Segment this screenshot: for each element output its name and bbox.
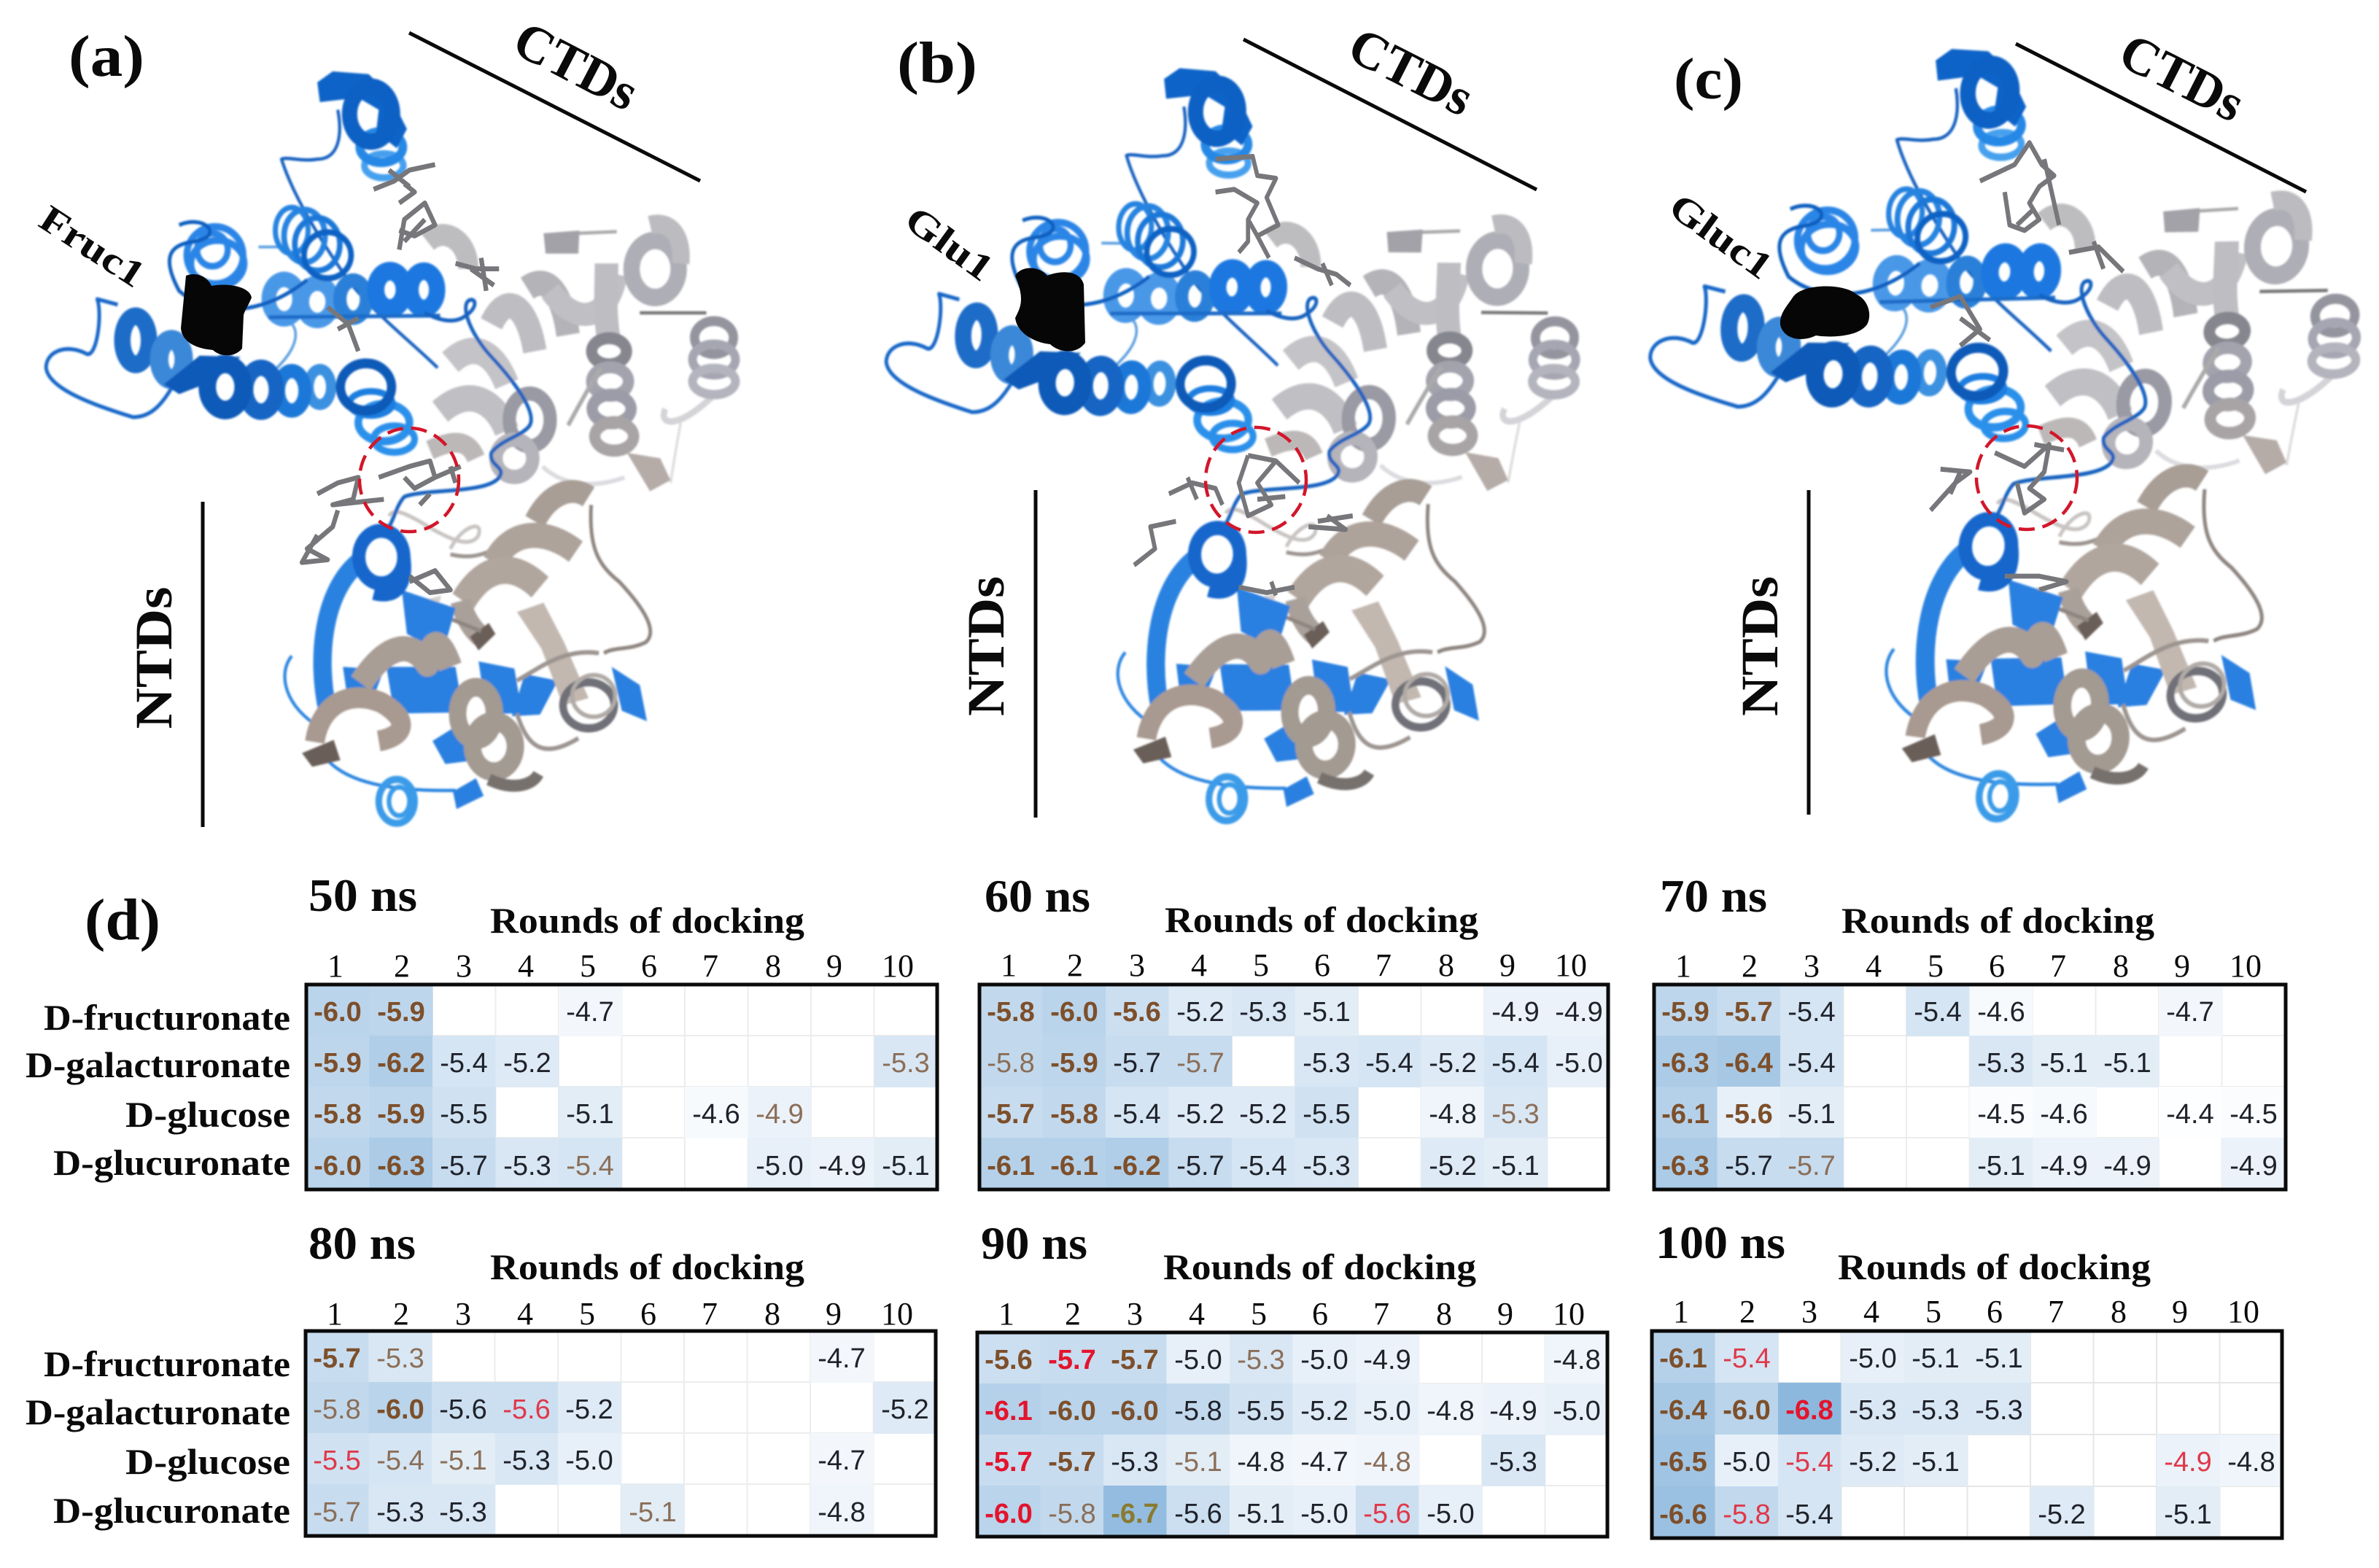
row labels 80 ns: D-glucose — [125, 1441, 290, 1482]
heatmap 60 ns: -6.0 — [1050, 997, 1098, 1028]
heatmap 50 ns — [306, 985, 938, 1189]
heatmap 80 ns: -5.6 — [502, 1394, 551, 1425]
heatmap 80 ns: -5.3 — [439, 1497, 487, 1528]
heatmap 60 ns — [979, 985, 1610, 1189]
heatmap 90 ns: -5.3 — [1111, 1447, 1159, 1478]
column numbers 100 ns — [1673, 1294, 2259, 1330]
column numbers 70 ns: 6 — [1989, 948, 2005, 984]
column numbers 100 ns: 1 — [1673, 1294, 1689, 1330]
heatmap 70 ns — [1654, 985, 2286, 1189]
ligands b — [1134, 156, 1353, 595]
row labels 50 ns: D-glucuronate — [53, 1142, 290, 1183]
CTDs label a: CTDs — [505, 9, 648, 122]
red dashed circle b — [1206, 427, 1306, 532]
heatmap 90 ns: -6.1 — [985, 1396, 1033, 1427]
heatmap 100 ns: -5.3 — [1912, 1395, 1960, 1426]
heatmap 100 ns: -6.6 — [1659, 1499, 1707, 1530]
column numbers 80 ns: 1 — [327, 1296, 343, 1332]
column numbers 70 ns: 10 — [2229, 948, 2262, 984]
column numbers 50 ns: 8 — [765, 948, 781, 984]
NTDs label c: NTDs — [1731, 576, 1789, 716]
column numbers 90 ns: 5 — [1251, 1296, 1267, 1332]
heatmap 100 ns: -6.1 — [1659, 1343, 1707, 1374]
heatmap 80 ns: -5.2 — [565, 1394, 613, 1425]
column numbers 60 ns: 5 — [1253, 947, 1269, 983]
column numbers 90 ns — [998, 1296, 1585, 1332]
heatmap 70 ns: -5.3 — [1977, 1048, 2025, 1079]
panel: 90 ns table — [977, 1217, 1609, 1537]
column numbers 50 ns: 3 — [456, 948, 472, 984]
heatmap 60 ns: -5.8 — [987, 1048, 1035, 1079]
heatmap 50 ns: -5.7 — [440, 1151, 488, 1181]
heatmap 100 ns: -5.1 — [1912, 1447, 1960, 1478]
column numbers 100 ns: 5 — [1925, 1294, 1941, 1330]
column numbers 50 ns: 2 — [394, 948, 410, 984]
column numbers 60 ns — [1001, 947, 1587, 983]
heatmap 60 ns: -6.1 — [1050, 1151, 1098, 1181]
column numbers 100 ns: 10 — [2227, 1294, 2259, 1330]
column numbers 70 ns: 3 — [1804, 948, 1820, 984]
heatmap 70 ns: -6.3 — [1661, 1048, 1709, 1079]
heatmap 70 ns: -4.6 — [1977, 997, 2025, 1028]
row labels 80 ns: D-galacturonate — [26, 1392, 290, 1432]
heatmap 100 ns: -4.8 — [2227, 1447, 2275, 1478]
column numbers 70 ns: 5 — [1928, 948, 1944, 984]
column numbers 100 ns: 9 — [2172, 1294, 2188, 1330]
heatmap 90 ns: -4.7 — [1300, 1447, 1348, 1478]
heatmap 70 ns: -4.4 — [2166, 1099, 2214, 1130]
column numbers 70 ns: 2 — [1742, 948, 1758, 984]
heatmap 100 ns: -5.3 — [1975, 1395, 2023, 1426]
label (b): (b) — [897, 31, 977, 96]
panel: 70 ns table — [1654, 870, 2286, 1189]
column numbers 70 ns — [1675, 948, 2262, 984]
heatmap 90 ns: -5.5 — [1237, 1396, 1285, 1427]
column numbers 90 ns: 8 — [1436, 1296, 1452, 1332]
heading 60 ns: 60 ns — [985, 870, 1090, 922]
column numbers 80 ns: 9 — [826, 1296, 842, 1332]
heatmap 70 ns: -4.7 — [2166, 997, 2214, 1028]
heatmap 50 ns: -5.1 — [566, 1099, 614, 1130]
heading 80 ns: 80 ns — [308, 1217, 416, 1269]
column numbers 50 ns: 4 — [518, 948, 534, 984]
heatmap 50 ns: -4.7 — [566, 997, 614, 1028]
column numbers 50 ns — [327, 948, 914, 984]
heatmap 100 ns: -6.4 — [1659, 1395, 1707, 1426]
heatmap 50 ns: -4.6 — [692, 1099, 740, 1130]
CTDs line a — [409, 33, 700, 181]
NTDs label b: NTDs — [957, 576, 1015, 716]
column numbers 50 ns: 6 — [641, 948, 657, 984]
row labels 50 ns: D-fructuronate — [44, 997, 290, 1038]
heatmap 80 ns: -5.1 — [629, 1497, 677, 1528]
heatmap 60 ns: -5.8 — [1050, 1099, 1098, 1130]
red dashed circle c — [1976, 426, 2077, 529]
column numbers 90 ns: 1 — [998, 1296, 1014, 1332]
heatmap 60 ns: -5.7 — [1113, 1048, 1161, 1079]
Fruc1 label: Fruc1 — [32, 198, 152, 296]
heatmap 80 ns: -5.2 — [881, 1394, 929, 1425]
heatmap 70 ns: -4.9 — [2229, 1151, 2278, 1181]
heatmap 60 ns: -5.7 — [987, 1099, 1035, 1130]
heatmap 100 ns: -6.0 — [1723, 1395, 1771, 1426]
axis title 100 ns: Rounds of docking — [1838, 1246, 2151, 1287]
heading 50 ns: 50 ns — [308, 869, 417, 921]
heatmap 100 ns: -5.2 — [2038, 1499, 2086, 1530]
heatmap 80 ns: -5.6 — [439, 1394, 487, 1425]
NTDs line c — [1807, 490, 1810, 815]
column numbers 90 ns: 10 — [1553, 1296, 1585, 1332]
heatmap 70 ns: -4.9 — [2103, 1151, 2151, 1181]
heatmap 60 ns: -5.3 — [1491, 1099, 1540, 1130]
heatmap 100 ns: -5.2 — [1849, 1447, 1897, 1478]
heatmap 90 ns: -5.8 — [1174, 1396, 1222, 1427]
column numbers 60 ns: 10 — [1555, 947, 1587, 983]
heatmap 90 ns: -4.8 — [1427, 1396, 1475, 1427]
ligands c — [1930, 143, 2123, 590]
column numbers 80 ns: 3 — [455, 1296, 471, 1332]
heatmap 70 ns: -6.3 — [1661, 1151, 1709, 1181]
heatmap 90 ns: -5.3 — [1237, 1345, 1285, 1375]
heatmap 50 ns: -5.4 — [440, 1048, 488, 1079]
row labels 50 ns — [26, 997, 290, 1183]
heatmap 90 ns: -5.7 — [985, 1447, 1033, 1478]
heatmap 60 ns: -5.2 — [1176, 1099, 1225, 1130]
heatmap 90 ns: -5.1 — [1174, 1447, 1222, 1478]
heatmap 100 ns: -5.0 — [1723, 1447, 1771, 1478]
heatmap 50 ns: -6.3 — [377, 1151, 425, 1181]
panel: (b) Glu1 structure — [876, 16, 1583, 823]
heatmap 50 ns: -5.4 — [566, 1151, 614, 1181]
heatmap 80 ns: -5.3 — [376, 1343, 424, 1374]
heatmap 60 ns: -5.2 — [1429, 1151, 1477, 1181]
heatmap 90 ns: -5.7 — [1111, 1345, 1159, 1375]
heatmap 60 ns: -5.1 — [1491, 1151, 1540, 1181]
heading 100 ns: 100 ns — [1656, 1216, 1785, 1268]
heatmap 90 ns: -5.6 — [1174, 1499, 1222, 1529]
row labels 80 ns: D-glucuronate — [53, 1490, 290, 1531]
CTDs line b — [1243, 39, 1537, 190]
protein ribbon b — [876, 66, 1583, 823]
heatmap 60 ns: -5.2 — [1176, 997, 1225, 1028]
protein ribbon c — [1638, 42, 2364, 825]
axis title 70 ns: Rounds of docking — [1842, 900, 2154, 941]
label (a): (a) — [69, 25, 144, 89]
heatmap 100 ns: -5.8 — [1723, 1499, 1771, 1530]
heatmap 60 ns: -5.4 — [1365, 1048, 1413, 1079]
heatmap 80 ns: -5.7 — [313, 1343, 361, 1374]
column numbers 50 ns: 1 — [327, 948, 344, 984]
heatmap 50 ns: -5.2 — [503, 1048, 551, 1079]
heatmap 90 ns: -5.0 — [1363, 1396, 1411, 1427]
heatmap 100 ns: -5.4 — [1785, 1447, 1833, 1478]
heading 70 ns: 70 ns — [1660, 870, 1767, 922]
heatmap 90 ns: -5.0 — [1300, 1345, 1348, 1375]
column numbers 80 ns: 4 — [517, 1296, 533, 1332]
heatmap 70 ns: -5.1 — [2103, 1048, 2151, 1079]
heatmap 90 ns: -4.8 — [1237, 1447, 1285, 1478]
column numbers 60 ns: 2 — [1067, 947, 1083, 983]
Glu1 label: Glu1 — [897, 198, 1001, 290]
heatmap 50 ns: -4.9 — [756, 1099, 804, 1130]
column numbers 80 ns: 8 — [764, 1296, 780, 1332]
heatmap 70 ns: -5.1 — [1788, 1099, 1836, 1130]
axis title 60 ns: Rounds of docking — [1165, 899, 1478, 940]
ligand blob Fruc1 — [181, 274, 252, 355]
heatmap 70 ns: -5.6 — [1725, 1099, 1773, 1130]
heatmap 50 ns: -5.3 — [882, 1048, 930, 1079]
heatmap 60 ns: -4.9 — [1555, 997, 1603, 1028]
heatmap 100 ns: -5.1 — [2164, 1499, 2212, 1530]
heatmap 70 ns: -5.7 — [1725, 1151, 1773, 1181]
heatmap 90 ns: -5.7 — [1048, 1447, 1096, 1478]
ligand blob Gluc1 — [1780, 286, 1869, 339]
label (c): (c) — [1674, 47, 1743, 112]
heatmap 90 ns: -4.8 — [1553, 1345, 1601, 1375]
heatmap 90 ns: -4.9 — [1363, 1345, 1411, 1375]
heatmap 70 ns: -5.4 — [1788, 997, 1836, 1028]
column numbers 100 ns: 3 — [1801, 1294, 1817, 1330]
column numbers 60 ns: 3 — [1129, 947, 1145, 983]
heatmap 90 ns: -5.7 — [1048, 1345, 1096, 1375]
heatmap 70 ns: -5.4 — [1914, 997, 1962, 1028]
heatmap 60 ns: -5.0 — [1555, 1048, 1603, 1079]
CTDs label b: CTDs — [1340, 16, 1483, 128]
heatmap 60 ns: -6.2 — [1113, 1151, 1161, 1181]
heatmap 70 ns: -4.9 — [2040, 1151, 2088, 1181]
heatmap 60 ns: -4.9 — [1491, 997, 1540, 1028]
heatmap 70 ns: -4.5 — [1977, 1099, 2025, 1130]
heatmap 90 ns: -5.8 — [1048, 1499, 1096, 1529]
heatmap 60 ns: -5.6 — [1113, 997, 1161, 1028]
panel: 50 ns table — [26, 869, 938, 1189]
panel: (c) Gluc1 structure — [1638, 22, 2364, 825]
heatmap 80 ns: -5.8 — [313, 1394, 361, 1425]
column numbers 90 ns: 6 — [1312, 1296, 1328, 1332]
heatmap 70 ns: -5.4 — [1788, 1048, 1836, 1079]
heatmap 60 ns: -5.5 — [1303, 1099, 1351, 1130]
column numbers 50 ns: 10 — [882, 948, 914, 984]
heatmap 60 ns: -5.2 — [1239, 1099, 1287, 1130]
column numbers 80 ns: 6 — [640, 1296, 656, 1332]
column numbers 70 ns: 7 — [2050, 948, 2066, 984]
heatmap 90 ns: -5.6 — [985, 1345, 1033, 1375]
heatmap 70 ns: -6.4 — [1725, 1048, 1773, 1079]
heatmap 60 ns: -5.7 — [1176, 1048, 1225, 1079]
heatmap 90 ns: -6.0 — [1111, 1396, 1159, 1427]
heatmap 50 ns: -6.0 — [314, 1151, 362, 1181]
heatmap 50 ns: -5.9 — [314, 1048, 362, 1079]
heatmap 80 ns — [306, 1331, 936, 1536]
heatmap 60 ns: -5.8 — [987, 997, 1035, 1028]
column numbers 100 ns: 4 — [1863, 1294, 1879, 1330]
heatmap 80 ns: -5.3 — [376, 1497, 424, 1528]
heatmap 90 ns: -5.3 — [1489, 1447, 1537, 1478]
column numbers 50 ns: 7 — [702, 948, 718, 984]
column numbers 70 ns: 1 — [1675, 948, 1691, 984]
column numbers 80 ns: 7 — [702, 1296, 718, 1332]
heatmap 70 ns: -5.7 — [1725, 997, 1773, 1028]
heatmap 90 ns: -5.0 — [1553, 1396, 1601, 1427]
heatmap 50 ns: -6.0 — [314, 997, 362, 1028]
heatmap 60 ns: -5.3 — [1303, 1048, 1351, 1079]
CTDs line c — [2016, 44, 2306, 192]
heatmap 100 ns: -6.5 — [1659, 1447, 1707, 1478]
heatmap 60 ns: -6.1 — [987, 1151, 1035, 1181]
column numbers 70 ns: 4 — [1866, 948, 1882, 984]
heatmap 100 ns: -5.4 — [1785, 1499, 1833, 1530]
column numbers 70 ns: 8 — [2113, 948, 2129, 984]
column numbers 80 ns: 10 — [881, 1296, 913, 1332]
heatmap 100 ns: -5.3 — [1849, 1395, 1897, 1426]
heatmap 50 ns: -5.9 — [377, 997, 425, 1028]
heatmap 100 ns: -5.1 — [1975, 1343, 2023, 1374]
heading 90 ns: 90 ns — [981, 1217, 1087, 1269]
heatmap 70 ns: -5.9 — [1661, 997, 1709, 1028]
column numbers 80 ns: 5 — [579, 1296, 595, 1332]
heatmap 50 ns: -5.3 — [503, 1151, 551, 1181]
heatmap 90 ns — [977, 1332, 1609, 1537]
column numbers 60 ns: 4 — [1191, 947, 1207, 983]
ligand blob Glu1 — [1015, 268, 1085, 352]
heatmap 90 ns: -4.9 — [1489, 1396, 1537, 1427]
column numbers 100 ns: 7 — [2048, 1294, 2064, 1330]
heatmap 60 ns: -5.4 — [1239, 1151, 1287, 1181]
heatmap 90 ns: -5.1 — [1237, 1499, 1285, 1529]
heatmap 90 ns: -6.0 — [1048, 1396, 1096, 1427]
red dashed circle a — [360, 428, 459, 532]
column numbers 90 ns: 9 — [1497, 1296, 1513, 1332]
heatmap 80 ns: -4.8 — [818, 1497, 866, 1528]
heatmap 50 ns: -5.8 — [314, 1099, 362, 1130]
panel: (a) Fruc1 structure — [32, 9, 735, 827]
heatmap 60 ns: -4.8 — [1429, 1099, 1477, 1130]
heatmap 70 ns: -4.6 — [2040, 1099, 2088, 1130]
heatmap 80 ns: -4.7 — [818, 1445, 866, 1476]
heatmap 100 ns: -5.0 — [1849, 1343, 1897, 1374]
heatmap 80 ns: -5.7 — [313, 1497, 361, 1528]
row labels 50 ns: D-glucose — [125, 1094, 290, 1135]
column numbers 60 ns: 8 — [1438, 947, 1454, 983]
panel: 60 ns table — [979, 870, 1610, 1189]
column numbers 70 ns: 9 — [2174, 948, 2190, 984]
heatmap 90 ns: -5.0 — [1174, 1345, 1222, 1375]
heatmap 100 ns: -4.9 — [2164, 1447, 2212, 1478]
heatmap 80 ns: -5.3 — [502, 1445, 551, 1476]
heatmap 100 ns — [1652, 1331, 2283, 1538]
heatmap 70 ns: -5.7 — [1788, 1151, 1836, 1181]
heatmap 60 ns: -5.1 — [1303, 997, 1351, 1028]
column numbers 90 ns: 4 — [1189, 1296, 1205, 1332]
heatmap 70 ns: -5.1 — [2040, 1048, 2088, 1079]
column numbers 100 ns: 8 — [2111, 1294, 2127, 1330]
column numbers 100 ns: 2 — [1739, 1294, 1755, 1330]
row labels 80 ns — [26, 1343, 290, 1531]
heatmap 90 ns: -5.0 — [1427, 1499, 1475, 1529]
panel: 100 ns table — [1652, 1216, 2283, 1538]
heatmap 60 ns: -5.4 — [1113, 1099, 1161, 1130]
heatmap 60 ns: -5.9 — [1050, 1048, 1098, 1079]
panel: 80 ns table — [26, 1217, 936, 1536]
column numbers 80 ns — [327, 1296, 913, 1332]
column numbers 90 ns: 3 — [1127, 1296, 1143, 1332]
heatmap 80 ns: -5.0 — [565, 1445, 613, 1476]
column numbers 80 ns: 2 — [393, 1296, 409, 1332]
heatmap 60 ns: -5.3 — [1239, 997, 1287, 1028]
heatmap 80 ns: -5.1 — [439, 1445, 487, 1476]
heatmap 90 ns: -5.2 — [1300, 1396, 1348, 1427]
heatmap 90 ns: -6.0 — [985, 1499, 1033, 1529]
heatmap 70 ns: -6.1 — [1661, 1099, 1709, 1130]
column numbers 60 ns: 6 — [1314, 947, 1330, 983]
column numbers 90 ns: 2 — [1065, 1296, 1081, 1332]
heatmap 50 ns: -5.9 — [377, 1099, 425, 1130]
heatmap 60 ns: -5.3 — [1303, 1151, 1351, 1181]
column numbers 90 ns: 7 — [1373, 1296, 1389, 1332]
heatmap 90 ns: -4.8 — [1363, 1447, 1411, 1478]
heatmap 80 ns: -6.0 — [376, 1394, 424, 1425]
column numbers 50 ns: 9 — [826, 948, 842, 984]
heatmap 90 ns: -5.6 — [1363, 1499, 1411, 1529]
axis title 80 ns: Rounds of docking — [490, 1246, 804, 1287]
heatmap 60 ns: -5.2 — [1429, 1048, 1477, 1079]
heatmap 90 ns: -6.7 — [1111, 1499, 1159, 1529]
heatmap 80 ns: -5.4 — [376, 1445, 424, 1476]
heatmap 70 ns: -4.5 — [2229, 1099, 2278, 1130]
CTDs label c: CTDs — [2111, 22, 2254, 133]
heatmap 50 ns: -5.0 — [756, 1151, 804, 1181]
label (d): (d) — [85, 888, 160, 952]
axis title 50 ns: Rounds of docking — [490, 900, 804, 941]
column numbers 60 ns: 1 — [1001, 947, 1017, 983]
row labels 50 ns: D-galacturonate — [26, 1044, 290, 1085]
heatmap 100 ns: -5.4 — [1723, 1343, 1771, 1374]
ligands a — [302, 165, 499, 593]
Gluc1 label: Gluc1 — [1661, 186, 1780, 288]
heatmap 50 ns: -5.5 — [440, 1099, 488, 1130]
heatmap 50 ns: -4.9 — [818, 1151, 866, 1181]
protein ribbon a — [46, 71, 735, 823]
heatmap 90 ns: -5.0 — [1300, 1499, 1348, 1529]
heatmap 50 ns: -5.1 — [882, 1151, 930, 1181]
heatmap 80 ns: -5.5 — [313, 1445, 361, 1476]
heatmap 50 ns: -6.2 — [377, 1048, 425, 1079]
heatmap 80 ns: -4.7 — [818, 1343, 866, 1374]
column numbers 60 ns: 7 — [1375, 947, 1392, 983]
NTDs label a: NTDs — [125, 586, 183, 729]
heatmap 100 ns: -5.1 — [1912, 1343, 1960, 1374]
row labels 80 ns: D-fructuronate — [44, 1343, 290, 1384]
column numbers 50 ns: 5 — [580, 948, 596, 984]
NTDs line a — [201, 502, 204, 827]
NTDs line b — [1034, 490, 1037, 818]
column numbers 100 ns: 6 — [1987, 1294, 2003, 1330]
heatmap 100 ns: -6.8 — [1785, 1395, 1833, 1426]
heatmap 70 ns: -5.1 — [1977, 1151, 2025, 1181]
heatmap 60 ns: -5.4 — [1491, 1048, 1540, 1079]
column numbers 60 ns: 9 — [1499, 947, 1516, 983]
axis title 90 ns: Rounds of docking — [1163, 1246, 1476, 1287]
heatmap 60 ns: -5.7 — [1176, 1151, 1225, 1181]
